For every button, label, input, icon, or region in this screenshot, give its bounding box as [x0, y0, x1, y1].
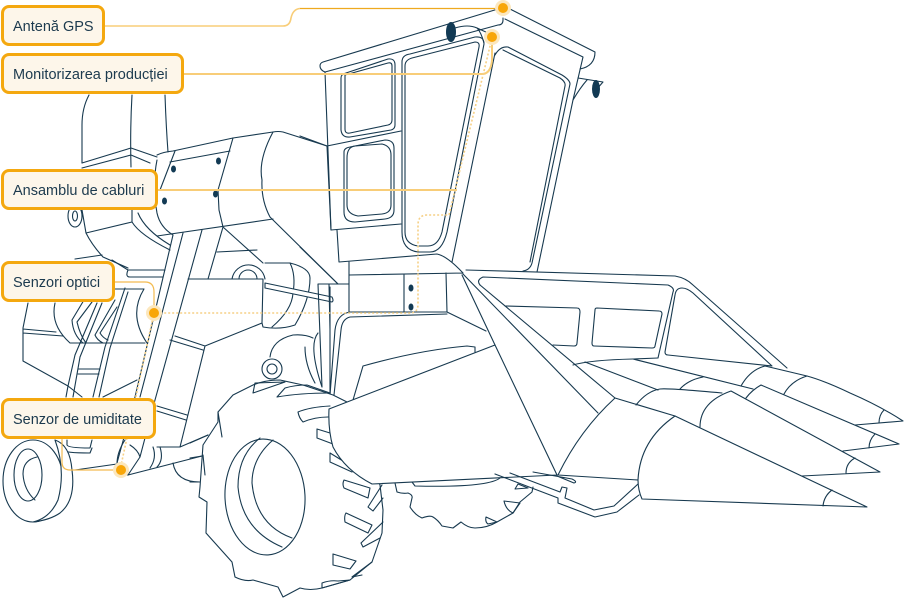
rear scalloped wheel	[395, 478, 533, 528]
label: moisture sensor	[1, 398, 156, 439]
lower cab body	[330, 312, 486, 400]
icon: mirrors	[446, 22, 603, 100]
small rear wheel	[3, 440, 73, 522]
cab windows	[341, 37, 570, 271]
side panel and support arm	[117, 230, 263, 475]
connector: yield monitoring line	[183, 38, 492, 74]
label: yield monitoring: Monitorizarea producției	[13, 67, 168, 83]
connector: optical sensors line	[114, 282, 154, 313]
marker: moisture sensor	[113, 462, 129, 478]
header top frame	[463, 270, 787, 413]
header snouts	[558, 359, 903, 507]
label: optical sensors	[1, 261, 115, 302]
label: cable assembly: Ansamblu de cabluri	[13, 183, 144, 199]
label: cable assembly	[1, 169, 158, 210]
header lower frame	[495, 472, 639, 517]
label: optical sensors: Senzori optici	[13, 275, 100, 291]
marker: optical sensors	[146, 305, 162, 321]
label: GPS antenna: Antenă GPS	[13, 19, 94, 35]
label: moisture sensor: Senzor de umiditate	[13, 412, 142, 428]
cab	[300, 8, 595, 312]
engine hood	[154, 132, 338, 284]
connector: cable assembly line	[157, 189, 457, 191]
marker: GPS antenna	[495, 0, 511, 16]
label: yield monitoring	[1, 53, 184, 94]
rear grain tank	[68, 95, 170, 277]
label: GPS antenna	[1, 5, 105, 46]
marker: yield monitoring	[484, 29, 500, 45]
connector: GPS antenna line	[105, 8, 500, 26]
header left shroud	[329, 275, 557, 484]
intake tank and pipe	[232, 247, 349, 393]
large front tire	[190, 380, 383, 597]
radiator and ladder	[23, 288, 200, 482]
connector: moisture sensor line	[62, 438, 120, 470]
connector: dotted cable route	[120, 38, 492, 470]
